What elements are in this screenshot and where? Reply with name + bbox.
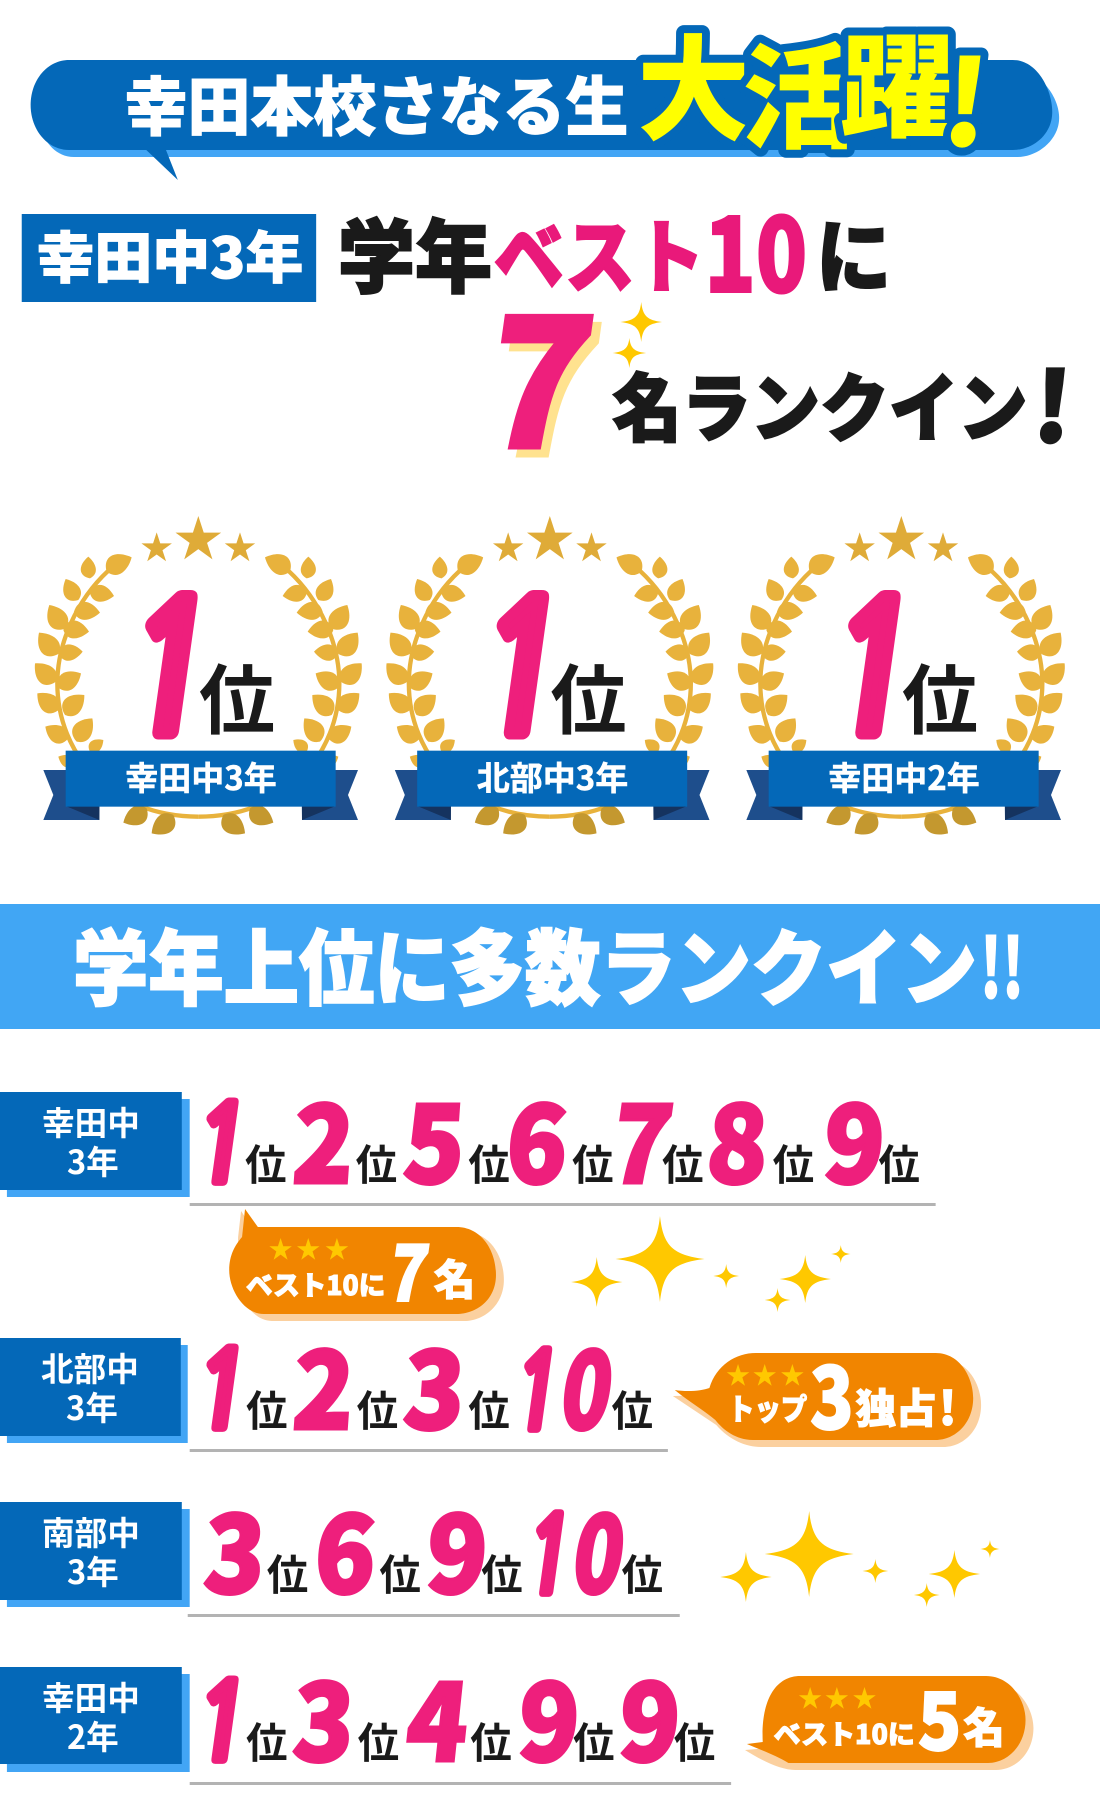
ranks: 6 (502, 1060, 573, 1214)
ranks: 位 (246, 1379, 288, 1439)
badge: Koda junior high 3rd year: 幸田中3年 (37, 214, 303, 295)
ribbon label: 幸田中3年 (125, 752, 277, 800)
callout: top 3 monopoly (673, 1330, 981, 1454)
ranks: 位 (573, 1711, 615, 1771)
callout: top 3 monopoly: 3 (810, 1330, 854, 1454)
headline: grade best 10: ベスト (494, 193, 704, 309)
label: 北部中 (41, 1344, 139, 1391)
callout: 5 in best 10 (745, 1661, 1033, 1773)
headline: ranked in: ! (1030, 330, 1077, 470)
row: Koda 3rd year (0, 1060, 936, 1214)
callout: top 3 monopoly: 独占 (856, 1376, 937, 1435)
ranks: 位 (468, 1133, 510, 1193)
label: 南部中 (42, 1508, 140, 1555)
label (0, 1667, 190, 1772)
callout: top 3 monopoly: トップ (728, 1385, 807, 1429)
big number 7: 7 (472, 243, 610, 500)
ranks: 1 (186, 1339, 259, 1445)
heading: school students: 幸田本校さなる生 (124, 57, 628, 149)
ranks: 2 (289, 1306, 360, 1460)
laurel badge: Hokubu 3rd year (379, 516, 720, 842)
ranks: 位 (572, 1133, 614, 1193)
heading: great success: ! (936, 9, 997, 180)
headline: grade best 10: 10 (704, 174, 807, 322)
row: Nanbu 3rd year (0, 1470, 680, 1624)
ranks (200, 1470, 663, 1624)
callout: 7 in best 10: 名 (434, 1248, 475, 1308)
callout: 5 in best 10: 5 (918, 1661, 961, 1773)
label: 3年 (67, 1137, 119, 1184)
headline: grade best 10: に (816, 193, 891, 309)
sparkles (720, 1511, 1000, 1607)
ranks: 位 (481, 1543, 523, 1603)
ranks: 位 (674, 1711, 715, 1771)
ranks: 位 (358, 1711, 399, 1771)
ranks: 位 (773, 1133, 814, 1193)
ranks: 1 (186, 1093, 259, 1199)
ranks: 位 (267, 1543, 308, 1603)
label: 3年 (67, 1547, 119, 1594)
laurel badge: Koda 2nd year (731, 516, 1072, 842)
ranks (186, 1060, 920, 1214)
heading: great success: 大 (637, 0, 750, 164)
ranks: 9 (422, 1470, 493, 1624)
ranks: 10 (515, 1472, 636, 1624)
ranks: 3 (200, 1470, 271, 1624)
laurel badge: Koda 3rd year (28, 516, 369, 842)
row: Koda 2nd year (0, 1638, 731, 1792)
ranks: 9 (514, 1638, 585, 1792)
ribbon label: 北部中3年 (477, 752, 628, 800)
ranks: 位 (612, 1379, 653, 1439)
row: Hokubu 3rd year (0, 1306, 668, 1460)
ranks: 位 (621, 1543, 663, 1603)
ranks: 位 (470, 1711, 512, 1771)
ranks: 4 (400, 1638, 477, 1792)
label (0, 1502, 190, 1607)
label: 幸田中 (42, 1098, 140, 1145)
ranks: 9 (615, 1638, 686, 1792)
ranks: 位 (245, 1133, 287, 1193)
callout: 5 in best 10: 名 (963, 1696, 1005, 1756)
ranks: 5 (399, 1060, 471, 1214)
header speech bubble (31, 57, 1059, 180)
ranks: 位 (878, 1133, 920, 1193)
sparkles (571, 1216, 851, 1312)
callout: 7 in best 10: ベスト10に (246, 1264, 385, 1303)
headline: grade best 10: 学年 (338, 193, 492, 309)
big number 7: 7 (480, 251, 618, 508)
ranks (186, 1638, 715, 1792)
ranks: 8 (703, 1060, 774, 1214)
label: 3年 (66, 1383, 118, 1430)
ranks: 6 (310, 1470, 382, 1624)
label (0, 1338, 188, 1443)
ranks: 10 (503, 1308, 624, 1460)
callout: 7 in best 10: 7 (383, 1214, 436, 1324)
ribbon label: 幸田中2年 (828, 752, 980, 800)
ranks: 7 (603, 1061, 683, 1214)
ranks: 3 (289, 1638, 360, 1792)
sparkles beside 7 (613, 302, 662, 368)
headline: grade best 10 (338, 174, 891, 322)
ranks: 位 (379, 1543, 421, 1603)
ranks: 位 (356, 1133, 397, 1193)
callout: 7 in best 10 (229, 1209, 504, 1324)
callout: top 3 monopoly: ! (939, 1373, 957, 1439)
heading: great success: 躍 (841, 0, 953, 161)
label: 2年 (67, 1712, 119, 1759)
heading: great success: 活 (742, 7, 855, 172)
ranks: 位 (662, 1133, 703, 1193)
section band: !! (980, 903, 1024, 1022)
ranks: 位 (246, 1711, 288, 1771)
section band: 学年上位に多数ランクイン (73, 903, 977, 1022)
ranks (186, 1306, 653, 1460)
ranks: 3 (399, 1306, 471, 1460)
label (0, 1092, 190, 1197)
callout: 5 in best 10: ベスト10に (774, 1713, 915, 1752)
heading: great success (637, 0, 997, 180)
ranks: 2 (289, 1060, 360, 1214)
ranks: 9 (819, 1060, 890, 1214)
headline: ranked in: 名ランクイン (613, 350, 1028, 457)
ranks: 位 (357, 1379, 398, 1439)
ranks: 位 (468, 1379, 510, 1439)
label: 幸田中 (42, 1673, 140, 1720)
ranks: 1 (186, 1671, 259, 1777)
